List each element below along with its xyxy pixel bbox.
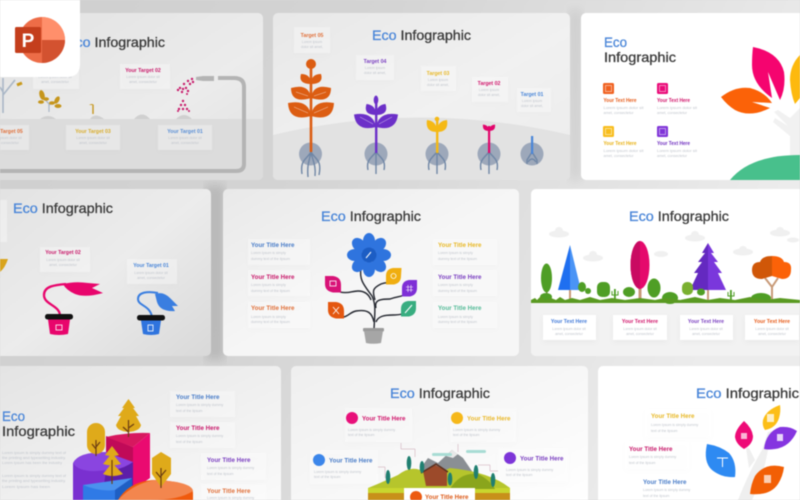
card: target 02: dolor sit amet,: [478, 93, 500, 97]
card: yellow: text of the lipsum: [651, 429, 678, 433]
tree: pink oval: [630, 241, 650, 303]
card: pink: Lorem Ipsum is simply dummy: [176, 434, 224, 438]
card: pink: [613, 315, 667, 340]
mounds: [40, 114, 192, 119]
card: blue: text of the lipsum: [176, 409, 203, 413]
shrubs and cacti: [540, 278, 771, 304]
card: purple: [201, 453, 266, 480]
plant: pink: [483, 124, 495, 153]
chart: blue segment: [83, 478, 132, 500]
card: purple: Your Text Here: [688, 319, 724, 325]
landscape: [368, 450, 510, 500]
card: pink: Your Title Here: [362, 416, 406, 422]
card: left pink: dummy text of the lipsum: [251, 289, 290, 293]
card: left blue: [248, 239, 310, 265]
body text: the printing and typesetting industry.: [2, 456, 66, 460]
item: orange: amet, consectetur: [604, 111, 634, 115]
panel: 3D chart slide: [0, 366, 281, 500]
card: right green: Your Title Here: [438, 305, 482, 312]
hose: [0, 76, 244, 171]
card: target 04: [33, 64, 79, 89]
card: target 02: Lorem ipsum dolor sit: [46, 258, 80, 262]
card: purple: amet, consectetur: [692, 332, 721, 336]
card: target 01: amet, consectetur: [137, 276, 166, 280]
card: target 04: dolor sit amet,: [364, 71, 386, 75]
card: yellow: text of the lipsum: [453, 433, 480, 437]
card: blue: [638, 473, 702, 500]
card: pink: [170, 422, 235, 448]
item: purple: Lorem ipsum dolor sit: [657, 149, 697, 153]
card: right green: [433, 302, 497, 328]
card: left pink: Your Title Here: [251, 274, 295, 281]
card: target 01: amet, consectetur: [171, 141, 200, 145]
card: orange: [745, 315, 799, 340]
card: yellow: Lorem Ipsum is simply dummy: [651, 423, 699, 427]
title: tree list slide: [604, 34, 676, 65]
chart: purple segment: [73, 452, 133, 500]
card: purple: [498, 448, 568, 482]
leaf: blue: [706, 444, 735, 477]
card: target 01: [158, 125, 212, 150]
card: purple: [680, 315, 733, 340]
card: pink: amet, consectetur: [626, 332, 655, 336]
leaf: pink: [325, 276, 341, 292]
card: target 03: Your Target 03: [75, 129, 111, 135]
panel: leaves slide: [598, 366, 800, 500]
card: purple: Lorem ipsum dolor sit: [689, 327, 723, 331]
card: purple: Your Title Here: [207, 457, 251, 464]
title: leaves slide: Eco Infographic: [696, 385, 799, 401]
tree: top: [116, 399, 141, 437]
card: pink: Your Title Here: [629, 446, 673, 453]
title: plants slide: Eco Infographic: [372, 27, 471, 43]
card: target 03: [66, 125, 120, 150]
card: target 02: [40, 247, 90, 272]
card: target 03: [421, 66, 456, 91]
card: blue: Your Text Here: [551, 319, 587, 325]
tree: green oval: [541, 264, 552, 303]
card: yellow: [645, 409, 711, 437]
card: left orange: [248, 302, 310, 328]
leaf: orange: [750, 466, 784, 494]
leaf: yellow partial: [0, 259, 8, 272]
item: purple: Your Text Here: [657, 141, 690, 147]
tree: purple pine: [690, 243, 726, 303]
hill: green: [730, 155, 800, 180]
card: target 04: amet, consectetur: [41, 80, 70, 84]
card: pink: text of the lipsum: [176, 440, 203, 444]
card: pink: text of the lipsum: [629, 461, 656, 465]
item: pink: Your Text Here: [657, 98, 690, 104]
leaf: purple: [764, 427, 797, 450]
title: tree list slide: Eco: [604, 34, 627, 50]
card: left blue: dummy text of the lipsum: [251, 257, 290, 261]
plant: bare tree: [0, 78, 22, 113]
card: target 01: Target 01: [521, 92, 543, 98]
card: orange: [201, 484, 266, 500]
plant: sprout: [89, 104, 94, 114]
icon: PowerPoint logo: P: [22, 31, 35, 52]
tree: mid: [103, 446, 123, 484]
tree: blue triangle: [558, 245, 581, 303]
chart: orange segment: [118, 480, 193, 500]
card: blue: Your Title Here: [176, 394, 220, 401]
card: blue: text of the lipsum: [314, 475, 341, 479]
title: 3D slide: Infographic: [2, 423, 75, 439]
panel: growing plants slide: [273, 13, 570, 180]
card: target 02: [120, 64, 170, 89]
card: orange: Your Text Here: [754, 319, 790, 325]
body text: Lorem Ipsum has been: [2, 485, 50, 489]
plant: orange: [288, 59, 334, 152]
card: blue: Lorem Ipsum is simply dummy: [643, 488, 691, 492]
card: yellow: Your Title Here: [651, 413, 695, 420]
panel: watering target slide: [0, 13, 263, 180]
plant: pink pot: [44, 282, 103, 335]
tree: right: [152, 452, 171, 488]
leaf: orange: [328, 302, 344, 318]
leaf: purple: [402, 280, 417, 296]
title: 3D slide: Eco: [2, 408, 25, 424]
clouds: [549, 227, 799, 262]
card: target 02: Your Target 02: [45, 250, 81, 256]
card: left orange: dummy text of the lipsum: [251, 320, 290, 324]
item: purple: amet, consectetur: [657, 154, 688, 158]
title: flower slide: Eco Infographic: [321, 208, 421, 224]
card: target 05: [0, 125, 29, 150]
card: target 04: [356, 55, 394, 80]
card: right purple: [433, 270, 497, 296]
card: blue: Lorem Ipsum is simply dummy: [176, 403, 224, 407]
card: pink: text of the lipsum: [348, 433, 375, 437]
card: orange: Your Title Here: [207, 488, 251, 495]
title: potted slide: Eco Infographic: [13, 200, 113, 216]
card: right yellow: Your Title Here: [438, 242, 482, 249]
card: target 01: dolor sit amet,: [521, 104, 543, 108]
title: watering slide: Eco Infographic: [66, 34, 165, 50]
card: purple: Lorem Ipsum is simply dummy: [207, 466, 255, 470]
card: target 03: dolor sit amet,: [427, 83, 449, 87]
tree: yellow round: [87, 423, 105, 456]
card: blue: Your Title Here: [329, 458, 373, 464]
panel: landscape slide: [291, 366, 588, 500]
water drops: [177, 78, 194, 112]
card: target 04: Lorem ipsum dolor sit: [38, 75, 72, 79]
item: pink: Lorem ipsum dolor sit: [657, 106, 697, 110]
card: left pink: Lorem Ipsum is simply: [251, 283, 286, 287]
leaf: pink: [735, 421, 753, 449]
title: 3D slide: [2, 408, 75, 439]
card: purple: text of the lipsum: [207, 472, 234, 476]
card: target 01: [517, 88, 551, 112]
body text: Lorem ipsum is simply dummy text of: [2, 451, 66, 455]
clouds: [432, 450, 486, 456]
item: pink: [657, 83, 697, 115]
card: orange: Lorem Ipsum is simply dummy: [207, 496, 255, 500]
card: target 05: Target 05: [301, 33, 323, 39]
item: yellow: amet, consectetur: [604, 154, 634, 158]
card: orange: [404, 488, 475, 500]
grass: [531, 296, 800, 303]
plant: purple: [354, 96, 398, 153]
card: right yellow: Lorem Ipsum is simply: [438, 251, 473, 255]
panel: forest slide: [531, 189, 800, 356]
card: left blue: Your Title Here: [251, 242, 295, 249]
card: right purple: Your Title Here: [438, 274, 482, 281]
card: target 01: Lorem ipsum dolor sit: [134, 271, 168, 275]
item: yellow: [603, 126, 644, 158]
tree: orange: [752, 256, 791, 300]
card: right green: dummy text of the lipsum: [438, 320, 477, 324]
plant: blue pot: [137, 292, 178, 335]
card: left pink: [248, 270, 310, 296]
PowerPoint badge: [0, 0, 80, 77]
roots and soil circles: [299, 142, 544, 177]
body text: Lorem ipsum is simply dummy text of: [2, 474, 66, 478]
card: blue: [310, 450, 378, 484]
card: pink: Lorem ipsum dolor sit: [623, 327, 657, 331]
card: blue: [170, 391, 235, 417]
card: yellow: Your Title Here: [467, 416, 511, 422]
card: target 05: Lorem ipsum: [302, 40, 322, 44]
chart: pink wedge: [106, 433, 150, 490]
plant: yellow: [427, 117, 447, 153]
card: target 05: dolor sit amet,: [301, 45, 323, 49]
leaf: yellow: [790, 55, 800, 104]
card: blue: Your Title Here: [643, 479, 687, 486]
flower: [347, 233, 391, 277]
card: blue: Lorem ipsum dolor sit: [552, 327, 586, 331]
panel: potted plants slide: [0, 189, 211, 356]
plant stems: [340, 268, 408, 329]
card: target 04: Lorem ipsum: [365, 66, 385, 70]
item: orange: Lorem ipsum dolor sit: [604, 106, 644, 110]
card: target 05: [294, 27, 330, 53]
card: partial: [0, 200, 7, 242]
leaf: green: [401, 301, 416, 316]
card: target 03: Lorem ipsum: [428, 78, 448, 82]
card: orange: amet, consectetur: [758, 332, 787, 336]
card: orange: Lorem ipsum dolor sit: [755, 327, 789, 331]
card: target 04: Target 04: [364, 59, 386, 65]
card: target 02: [472, 77, 508, 102]
card: right green: Lorem Ipsum is simply: [438, 315, 473, 319]
card: target 01: [127, 259, 177, 284]
card: pink: Lorem Ipsum is simply dummy: [629, 455, 677, 459]
card: purple: Your Title Here: [520, 456, 564, 462]
card: target 02: amet, consectetur: [129, 80, 158, 84]
leaf: orange: [721, 88, 772, 114]
card: left orange: Your Title Here: [251, 305, 295, 312]
card: target 02: Lorem ipsum dolor sit: [126, 75, 160, 79]
leaf: yellow: [386, 268, 402, 284]
item: yellow: Your Text Here: [604, 141, 637, 147]
card: purple: text of the lipsum: [506, 473, 533, 477]
card: right yellow: dummy text of the lipsum: [438, 257, 477, 261]
card: blue: Lorem Ipsum is simply dummy: [314, 470, 362, 474]
card: pink: Your Title Here: [176, 425, 220, 432]
title: landscape slide: Eco Infographic: [390, 385, 490, 401]
card: blue: [543, 315, 596, 340]
panel: tree list slide: [581, 13, 800, 180]
body text: Lorem Ipsum has been the industry: [2, 461, 62, 465]
card: pink: Your Text Here: [622, 319, 658, 325]
card: target 02: amet, consectetur: [49, 263, 78, 267]
title: forest slide: Eco Infographic: [629, 208, 729, 224]
card: target 01: Your Target 01: [167, 129, 203, 135]
card: left orange: Lorem Ipsum is simply: [251, 315, 286, 319]
card: pink: Lorem Ipsum is simply dummy: [348, 428, 396, 432]
card: target 03: Target 03: [427, 71, 449, 77]
card: target 04: Your Target 04: [37, 68, 73, 74]
item: purple: [657, 126, 697, 158]
item: orange: Your Text Here: [604, 98, 637, 104]
tree stems: [738, 431, 772, 500]
card: left blue: Lorem Ipsum is simply: [251, 251, 286, 255]
card: right purple: dummy text of the lipsum: [438, 289, 477, 293]
item: yellow: Lorem ipsum dolor sit: [604, 149, 644, 153]
tree trunk: [773, 108, 800, 160]
item: orange: [603, 83, 644, 115]
card: target 02: Target 02: [478, 81, 500, 87]
card: yellow: Lorem Ipsum is simply dummy: [453, 428, 501, 432]
plant: blue shoot: [531, 136, 533, 154]
trees: teal: [386, 456, 495, 487]
card: target 01: Lorem ipsum dolor sit: [168, 136, 202, 140]
card: target 02: Lorem ipsum: [479, 88, 499, 92]
card: target 03: amet, consectetur: [79, 141, 108, 145]
card: target 02: Your Target 02: [125, 68, 161, 74]
item: pink: amet, consectetur: [657, 111, 688, 115]
pot: [363, 328, 384, 344]
panel: flower slide: [223, 189, 519, 356]
card: target 01: Lorem ipsum: [522, 99, 542, 103]
card: blue: text of the lipsum: [643, 494, 670, 498]
card: target 03: Lorem ipsum dolor sit: [76, 136, 110, 140]
card: target 01: Your Target 01: [133, 263, 169, 269]
card: pink: [345, 408, 412, 442]
title: tree list slide: Infographic: [604, 49, 676, 65]
card: right yellow: [433, 239, 497, 265]
card: purple: Lorem Ipsum is simply dummy: [506, 468, 554, 472]
leaf: pink: [752, 47, 784, 100]
plant: yellow sapling: [38, 89, 62, 112]
leaf: yellow: [763, 405, 780, 430]
body text: the printing and typesetting industry.: [2, 479, 66, 483]
card: yellow: [450, 408, 516, 442]
card: pink: [625, 441, 689, 469]
card: blue: amet, consectetur: [555, 332, 584, 336]
body text: [2, 451, 66, 489]
card: right purple: Lorem Ipsum is simply: [438, 283, 473, 287]
connector lines: [378, 443, 498, 478]
